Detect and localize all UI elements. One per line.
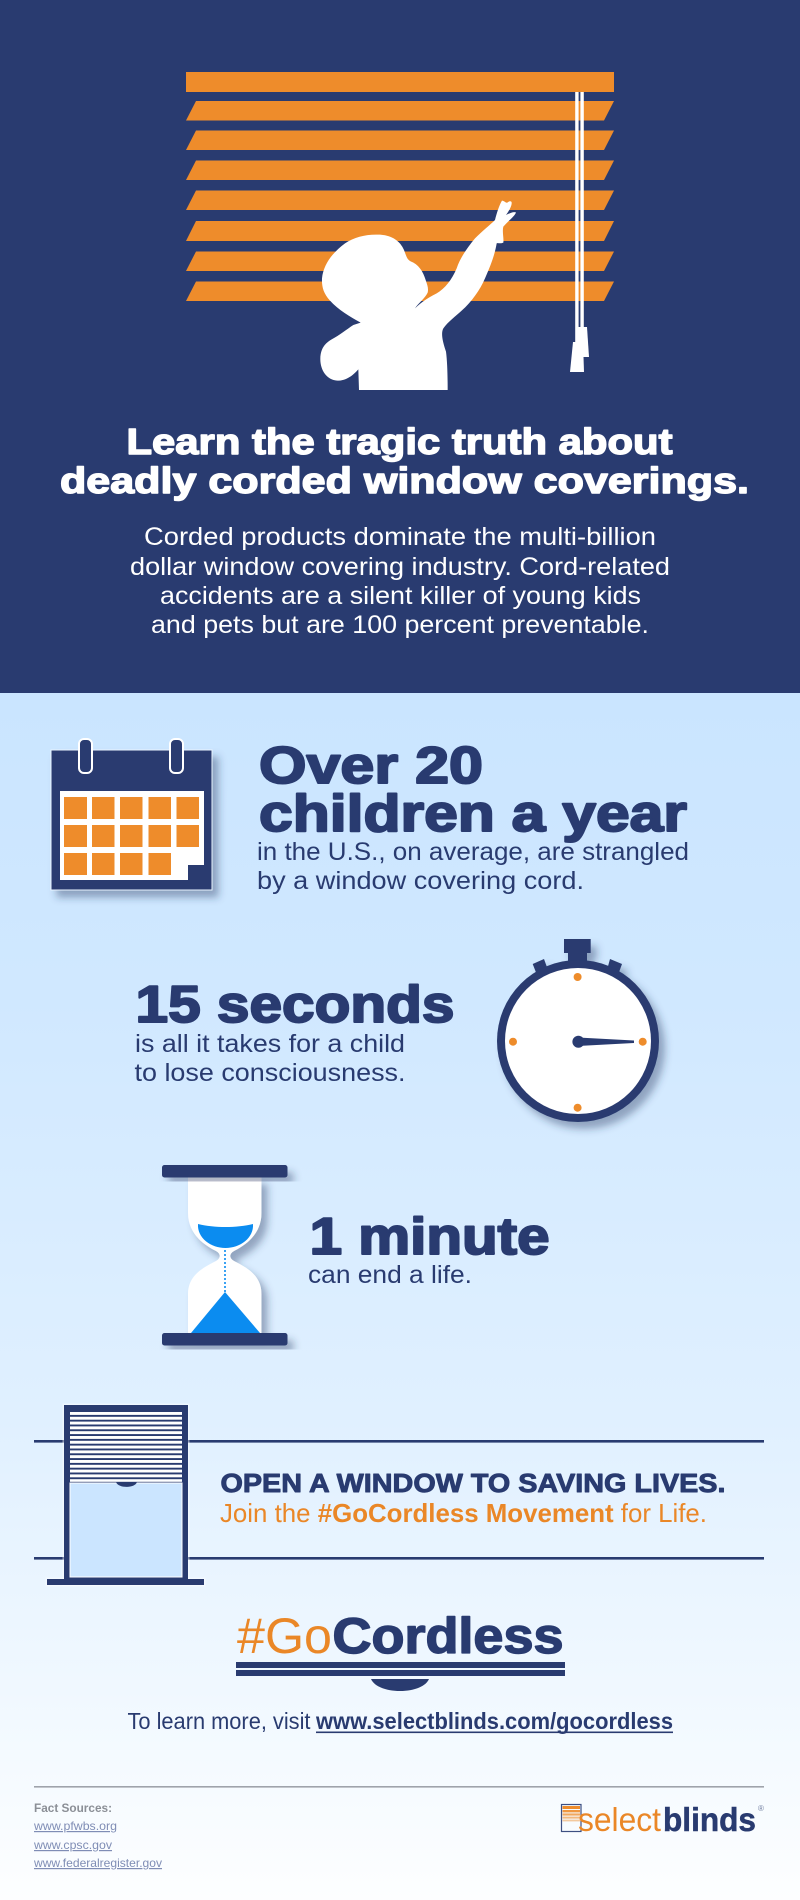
panel: header background xyxy=(0,0,800,693)
logo: GoCordless: #Go xyxy=(237,1608,332,1664)
logo: selectblinds: ® xyxy=(758,1804,764,1813)
footer divider xyxy=(34,1786,764,1788)
icon: window with blinds xyxy=(46,1404,206,1586)
panel: lower background xyxy=(0,693,800,1900)
intro paragraph: dollar window covering industry. Cord-related xyxy=(130,553,670,581)
title: deadly corded window coverings. xyxy=(60,460,749,501)
icon: stopwatch xyxy=(497,939,659,1122)
fact sources: www.pfwbs.org xyxy=(33,1819,117,1833)
stat: 1 minute: can end a life. xyxy=(308,1261,472,1289)
call to action text: OPEN A WINDOW TO SAVING LIVES. xyxy=(220,1468,726,1498)
blind cords and tassels xyxy=(570,92,589,372)
stat: over 20 children a year: by a window covering cord. xyxy=(257,867,584,895)
learn more link xyxy=(128,1708,673,1734)
title xyxy=(60,421,749,501)
stat: over 20 children a year xyxy=(257,737,689,895)
logo: GoCordless xyxy=(236,1608,565,1691)
learn more link: www.selectblinds.com/gocordless xyxy=(315,1708,673,1734)
blinds slats xyxy=(186,72,614,301)
intro paragraph: and pets but are 100 percent preventable. xyxy=(151,611,649,639)
stat: over 20 children a year: children a year xyxy=(259,785,687,843)
stat: over 20 children a year: Over 20 xyxy=(259,737,483,795)
logo: selectblinds: blinds xyxy=(663,1801,756,1838)
fact sources xyxy=(33,1801,162,1870)
logo: selectblinds xyxy=(562,1801,764,1838)
icon: calendar xyxy=(51,739,212,890)
intro paragraph: accidents are a silent killer of young kids xyxy=(160,582,641,610)
stat: 1 minute xyxy=(308,1208,550,1289)
icon: hourglass xyxy=(162,1165,288,1346)
call to action text xyxy=(220,1468,726,1528)
fact sources: www.cpsc.gov xyxy=(33,1838,112,1852)
intro paragraph xyxy=(130,523,670,639)
logo: selectblinds: select xyxy=(578,1801,661,1838)
call to action text: Join the #GoCordless Movement for Life. xyxy=(220,1498,707,1528)
title: Learn the tragic truth about xyxy=(126,421,673,462)
stat: 15 seconds: is all it takes for a child xyxy=(135,1030,405,1058)
stat: 15 seconds: to lose consciousness. xyxy=(134,1059,406,1087)
fact sources: Fact Sources: xyxy=(34,1801,112,1815)
stat: 15 seconds xyxy=(134,976,454,1087)
child silhouette xyxy=(320,201,516,390)
fact sources: www.federalregister.gov xyxy=(33,1856,162,1870)
callout lines xyxy=(34,1440,764,1560)
stat: 15 seconds: 15 seconds xyxy=(136,976,454,1034)
learn more link: To learn more, visit xyxy=(128,1708,311,1734)
stat: 1 minute: 1 minute xyxy=(310,1208,550,1266)
illustration: child reaching for corded blinds xyxy=(186,72,614,390)
intro paragraph: Corded products dominate the multi-billion xyxy=(144,523,656,551)
logo: GoCordless: Cordless xyxy=(332,1608,564,1664)
stat: over 20 children a year: in the U.S., on average, are strangled xyxy=(257,838,689,866)
